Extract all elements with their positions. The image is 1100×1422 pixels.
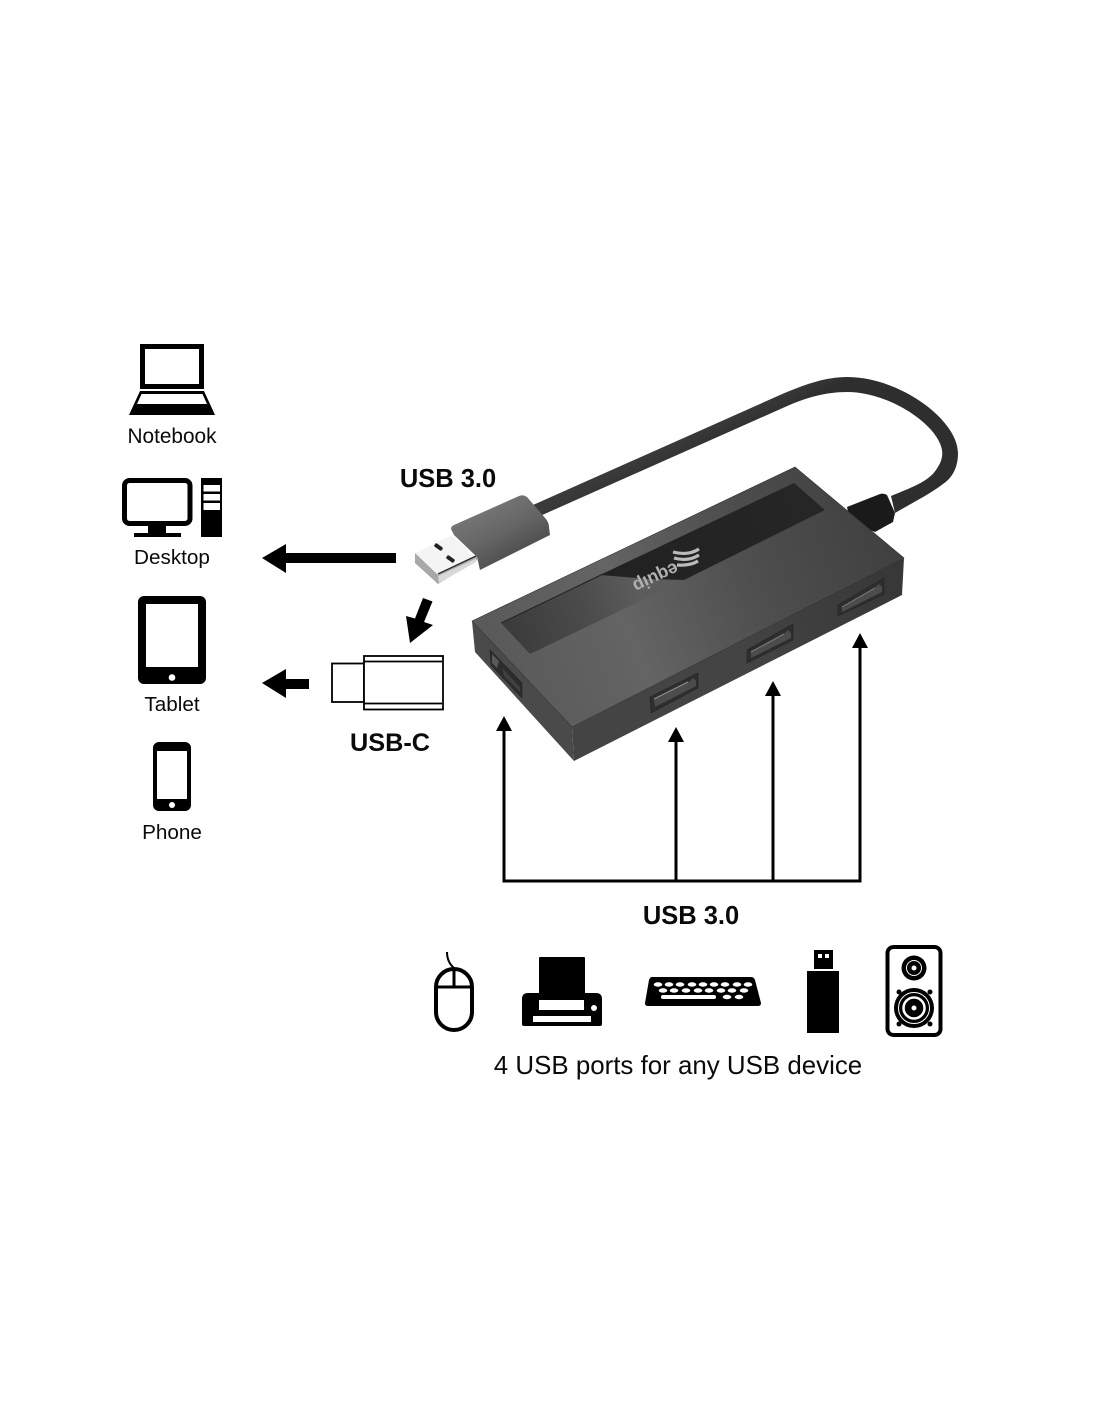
arrow: USB-C adapter to mobile devices [262, 669, 309, 698]
label: Phone: Phone [142, 821, 202, 844]
icon: speaker [888, 947, 940, 1035]
USB port 4 [838, 578, 884, 616]
icon: mouse [436, 952, 472, 1030]
stripe edge line [501, 574, 603, 623]
hub body front side [572, 558, 904, 761]
arrow: USB plug to computers [262, 544, 396, 573]
icon: tablet [138, 596, 206, 684]
USB-C adapter outline [332, 656, 443, 710]
caption: 4 USB ports for any USB device [494, 1052, 862, 1080]
hub top face [472, 467, 904, 727]
icon: notebook [129, 344, 215, 415]
hub body left side [472, 621, 574, 761]
label: Desktop: Desktop [134, 546, 210, 569]
USB port 1 (side) [490, 650, 522, 698]
cable [533, 377, 958, 516]
logo: equip: equip [630, 558, 682, 597]
port arrows bracket [496, 633, 868, 881]
USB port 3 [747, 624, 793, 663]
icon: printer [522, 957, 602, 1026]
stripe: left faded reflection [501, 574, 684, 654]
icon: desktop computer [124, 478, 222, 537]
label: USB-C: USB-C [350, 729, 430, 757]
USB-A plug metal tip [415, 535, 477, 584]
icon: phone [153, 742, 191, 811]
logo: equip [630, 549, 699, 597]
label: USB 3.0 (host connector): USB 3.0 [400, 465, 496, 493]
dark glossy stripe [600, 483, 825, 580]
label: Tablet: Tablet [144, 693, 200, 716]
icon: USB flash drive [807, 950, 839, 1033]
strain relief at hub [847, 494, 895, 532]
label: Notebook: Notebook [127, 425, 217, 448]
USB hub product illustration [415, 377, 958, 761]
arrow: USB plug into USB-C adapter [406, 598, 433, 643]
USB-A plug boot [451, 495, 550, 570]
USB port 2 [650, 673, 698, 713]
label: USB 3.0 (ports): USB 3.0 [643, 902, 739, 930]
icon: keyboard [645, 977, 761, 1006]
